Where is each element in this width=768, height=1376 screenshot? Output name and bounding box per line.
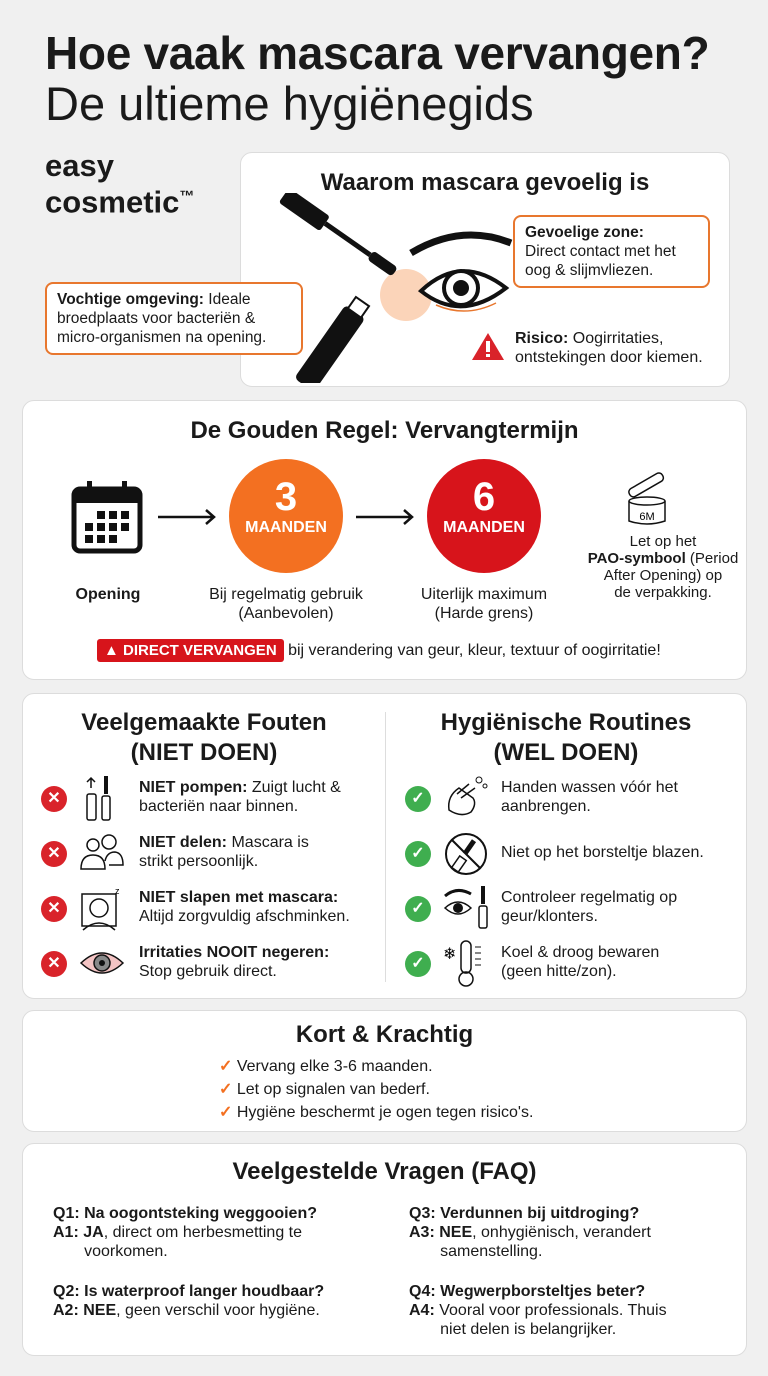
label: 6 maanden: Uiterlijk maximum (Harde grens) xyxy=(421,586,547,622)
text: PAO xyxy=(588,533,738,601)
item: koel bewaren: ❄ xyxy=(443,944,456,963)
item: niet pompen: ✕ xyxy=(47,790,61,807)
item: niet slapen: NIET slapen met mascara: xyxy=(139,889,338,906)
faq q3: Q3: Verdunnen bij uitdroging? xyxy=(409,1205,639,1222)
item: niet blazen: Niet op het borsteltje blazen. xyxy=(501,844,704,861)
icon: warning xyxy=(472,333,504,360)
callout: vochtige omgeving xyxy=(45,282,303,355)
item: irritaties xyxy=(41,944,329,980)
heading: Kort & Krachtig xyxy=(296,1021,473,1048)
illustration: mascara and eye xyxy=(280,193,512,383)
heading: Veelgestelde Vragen (FAQ) xyxy=(232,1158,537,1185)
title: Hoe vaak mascara vervangen? xyxy=(45,27,709,79)
logo: cosmetic™ xyxy=(45,184,194,219)
icon: PAO jar: 6M xyxy=(639,511,655,523)
faq q4: niet delen is belangrijker. xyxy=(440,1321,616,1338)
faq q1: voorkomen. xyxy=(84,1243,168,1260)
heading: routines: (WEL DOEN) xyxy=(494,739,638,766)
circle: 6 maanden xyxy=(427,459,541,573)
item: niet delen: strikt persoonlijk. xyxy=(139,853,258,870)
panel: why mascara is sensitive xyxy=(240,152,730,387)
arrow xyxy=(158,509,216,525)
item: irritaties: Irritaties NOOIT negeren: xyxy=(139,944,329,961)
checklist: ✓ Vervang elke 3-6 maanden. xyxy=(219,1058,433,1075)
label: 3 maanden: Bij regelmatig gebruik (Aanbevolen) xyxy=(209,586,363,622)
list: fouten xyxy=(41,776,350,980)
heading: fouten: Veelgemaakte Fouten xyxy=(81,709,327,736)
checklist xyxy=(219,1058,533,1121)
panel: golden rule xyxy=(22,400,747,680)
circle: 6 maanden: 6 xyxy=(473,475,495,519)
item: koel bewaren: (geen hitte/zon). xyxy=(501,963,617,980)
item: niet pompen xyxy=(41,776,341,821)
faq q3 xyxy=(409,1205,651,1260)
item: koel bewaren xyxy=(405,940,659,987)
faq q1 xyxy=(53,1205,317,1260)
item: controleer: geur/klonters. xyxy=(501,908,598,925)
item: niet slapen: ✕ xyxy=(47,900,61,917)
item: controleer: ✓ xyxy=(411,900,425,917)
circle: 3 maanden xyxy=(229,459,343,573)
faq q3: samenstelling. xyxy=(440,1243,542,1260)
item: handen wassen: ✓ xyxy=(411,790,425,807)
panel: do's and don'ts xyxy=(22,693,747,999)
list: routines xyxy=(405,776,704,987)
item: irritaties: ✕ xyxy=(47,955,61,972)
checklist: ✓ Hygiëne beschermt je ogen tegen risico's. xyxy=(219,1104,533,1121)
label: opening: Opening xyxy=(76,586,140,603)
title xyxy=(45,27,709,130)
item: handen wassen: aanbrengen. xyxy=(501,798,591,815)
logo: easy xyxy=(45,148,114,183)
heading: fouten: (NIET DOEN) xyxy=(131,739,277,766)
callout: vochtige omgeving: Vochtige omgeving: Ideale broedplaats voor bacteriën & micro-organismen na opening. xyxy=(57,291,266,346)
heading: routines: Hygiënische Routines xyxy=(441,709,691,736)
faq q4 xyxy=(409,1283,667,1338)
faq q3: A3: NEE, onhygiënisch, verandert xyxy=(409,1224,651,1241)
item: niet slapen: Altijd zorgvuldig afschminken. xyxy=(139,908,350,925)
text: PAO: After Opening) op xyxy=(604,567,722,584)
faq q2 xyxy=(53,1283,324,1319)
logo xyxy=(45,148,194,219)
callout: gevoelige zone: Direct contact met het oog & slijmvliezen. xyxy=(525,243,676,279)
item: koel bewaren: Koel & droog bewaren xyxy=(501,944,659,961)
item: niet blazen: ✓ xyxy=(411,845,425,862)
icon: PAO jar xyxy=(628,472,666,525)
faq q2: Q2: Is waterproof langer houdbaar? xyxy=(53,1283,324,1300)
item: niet delen: ✕ xyxy=(47,845,61,862)
heading: Waarom mascara gevoelig is xyxy=(321,169,649,196)
item: controleer: Controleer regelmatig op xyxy=(501,889,677,906)
faq q4: Q4: Wegwerpborsteltjes beter? xyxy=(409,1283,645,1300)
icon: calendar xyxy=(72,481,142,554)
item: irritaties: Stop gebruik direct. xyxy=(139,963,277,980)
item: niet slapen: z xyxy=(115,886,120,896)
item: niet slapen xyxy=(41,886,350,931)
item: handen wassen: Handen wassen vóór het xyxy=(501,779,678,796)
faq q2: A2: NEE, geen verschil voor hygiëne. xyxy=(53,1302,320,1319)
faq q4: A4: Vooral voor professionals. Thuis xyxy=(409,1302,667,1319)
heading: fouten xyxy=(81,709,327,766)
faq q1: A1: JA, direct om herbesmetting te xyxy=(53,1224,302,1241)
text: PAO: de verpakking. xyxy=(614,584,712,601)
title: De ultieme hygiënegids xyxy=(45,77,534,130)
item: niet delen xyxy=(41,834,309,870)
circle: 3 maanden: 3 xyxy=(275,475,297,519)
warning banner: ▲ DIRECT VERVANGEN bij verandering van geur, kleur, textuur of oogirritatie! xyxy=(104,642,661,659)
faq q1: Q1: Na oogontsteking weggooien? xyxy=(53,1205,317,1222)
item: handen wassen xyxy=(405,776,678,816)
callout: gevoelige zone xyxy=(513,215,710,288)
circle: 6 maanden: MAANDEN xyxy=(443,519,525,536)
item: koel bewaren: ✓ xyxy=(411,955,425,972)
item: niet pompen: bacteriën naar binnen. xyxy=(139,798,298,815)
text: PAO: PAO-symbool (Period xyxy=(588,550,738,567)
item: niet pompen: NIET pompen: Zuigt lucht & xyxy=(139,779,341,796)
arrow xyxy=(356,509,414,525)
heading: routines xyxy=(441,709,691,766)
text: PAO: Let op het xyxy=(630,533,696,550)
circle: 3 maanden: MAANDEN xyxy=(245,519,327,536)
checklist: ✓ Let op signalen van bederf. xyxy=(219,1081,430,1098)
heading: De Gouden Regel: Vervangtermijn xyxy=(190,417,579,444)
item: niet blazen xyxy=(405,833,704,875)
panel: FAQ xyxy=(22,1143,747,1356)
item: niet delen: NIET delen: Mascara is xyxy=(139,834,309,851)
callout: gevoelige zone: Gevoelige zone: xyxy=(525,224,644,241)
item: controleer xyxy=(405,886,677,929)
callout: risico: Risico: Oogirritaties, ontstekingen door kiemen. xyxy=(515,330,703,366)
panel: kort & krachtig xyxy=(22,1010,747,1132)
